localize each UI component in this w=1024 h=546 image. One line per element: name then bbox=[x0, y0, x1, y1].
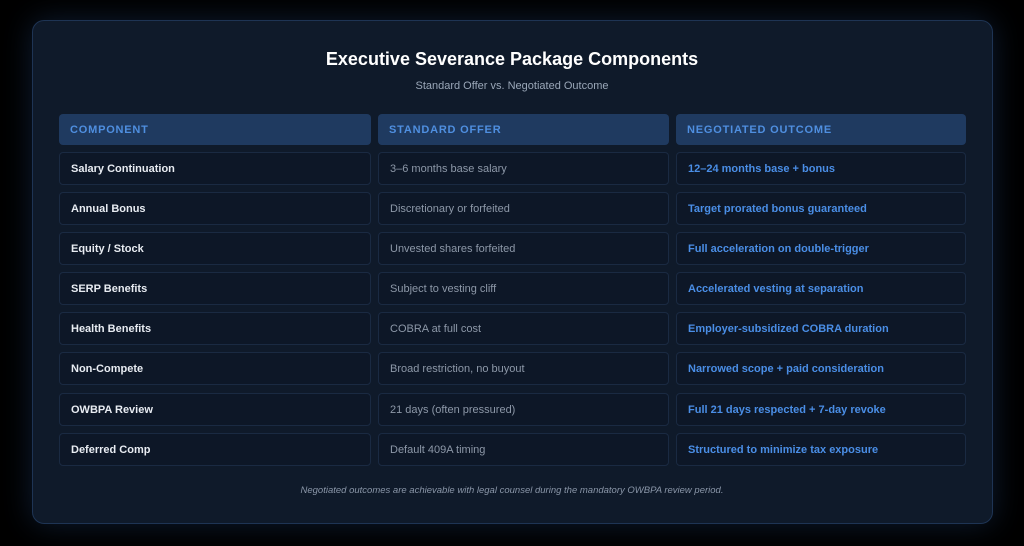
row 4 bbox=[59, 272, 966, 305]
row 7: OWBPA Review bbox=[71, 404, 153, 416]
row 1 bbox=[59, 152, 966, 185]
footnote: Negotiated outcomes are achievable with legal counsel during the mandatory OWBPA review period. bbox=[300, 485, 723, 496]
header: negotiated: NEGOTIATED OUTCOME bbox=[687, 124, 832, 136]
row 1: 3–6 months base salary bbox=[390, 162, 507, 174]
row 7: Full 21 days respected + 7-day revoke bbox=[688, 404, 886, 416]
row 4: SERP Benefits bbox=[71, 282, 147, 294]
row 1: 12–24 months base + bonus bbox=[688, 162, 835, 174]
row 8: Structured to minimize tax exposure bbox=[688, 444, 878, 456]
row 6: Non-Compete bbox=[71, 362, 143, 374]
row 5 bbox=[59, 312, 966, 345]
row 8: Deferred Comp bbox=[71, 444, 150, 456]
row 3 bbox=[59, 232, 966, 265]
row 2 bbox=[59, 192, 966, 225]
row 5: Employer-subsidized COBRA duration bbox=[688, 322, 889, 334]
row 6: Broad restriction, no buyout bbox=[390, 362, 525, 374]
row 1: Salary Continuation bbox=[71, 162, 175, 174]
subtitle: Standard Offer vs. Negotiated Outcome bbox=[415, 80, 608, 92]
row 5: Health Benefits bbox=[71, 322, 151, 334]
row 2: Target prorated bonus guaranteed bbox=[688, 202, 867, 214]
row 7 bbox=[59, 393, 966, 426]
row 3: Equity / Stock bbox=[71, 242, 144, 254]
title: Executive Severance Package Components bbox=[326, 49, 698, 69]
header: negotiated bbox=[676, 114, 966, 145]
row 3: Full acceleration on double-trigger bbox=[688, 242, 869, 254]
header: standard: STANDARD OFFER bbox=[389, 124, 501, 136]
row 4: Subject to vesting cliff bbox=[390, 282, 496, 294]
row 5: COBRA at full cost bbox=[390, 322, 481, 334]
row 8 bbox=[59, 433, 966, 466]
row 6: Narrowed scope + paid consideration bbox=[688, 362, 884, 374]
header: component: COMPONENT bbox=[70, 124, 149, 136]
row 6 bbox=[59, 352, 966, 385]
row 8: Default 409A timing bbox=[390, 444, 485, 456]
row 7: 21 days (often pressured) bbox=[390, 404, 515, 416]
header: standard bbox=[378, 114, 669, 145]
header: component bbox=[59, 114, 371, 145]
row 2: Annual Bonus bbox=[71, 202, 146, 214]
row 3: Unvested shares forfeited bbox=[390, 242, 515, 254]
row 4: Accelerated vesting at separation bbox=[688, 282, 863, 294]
row 2: Discretionary or forfeited bbox=[390, 202, 510, 214]
